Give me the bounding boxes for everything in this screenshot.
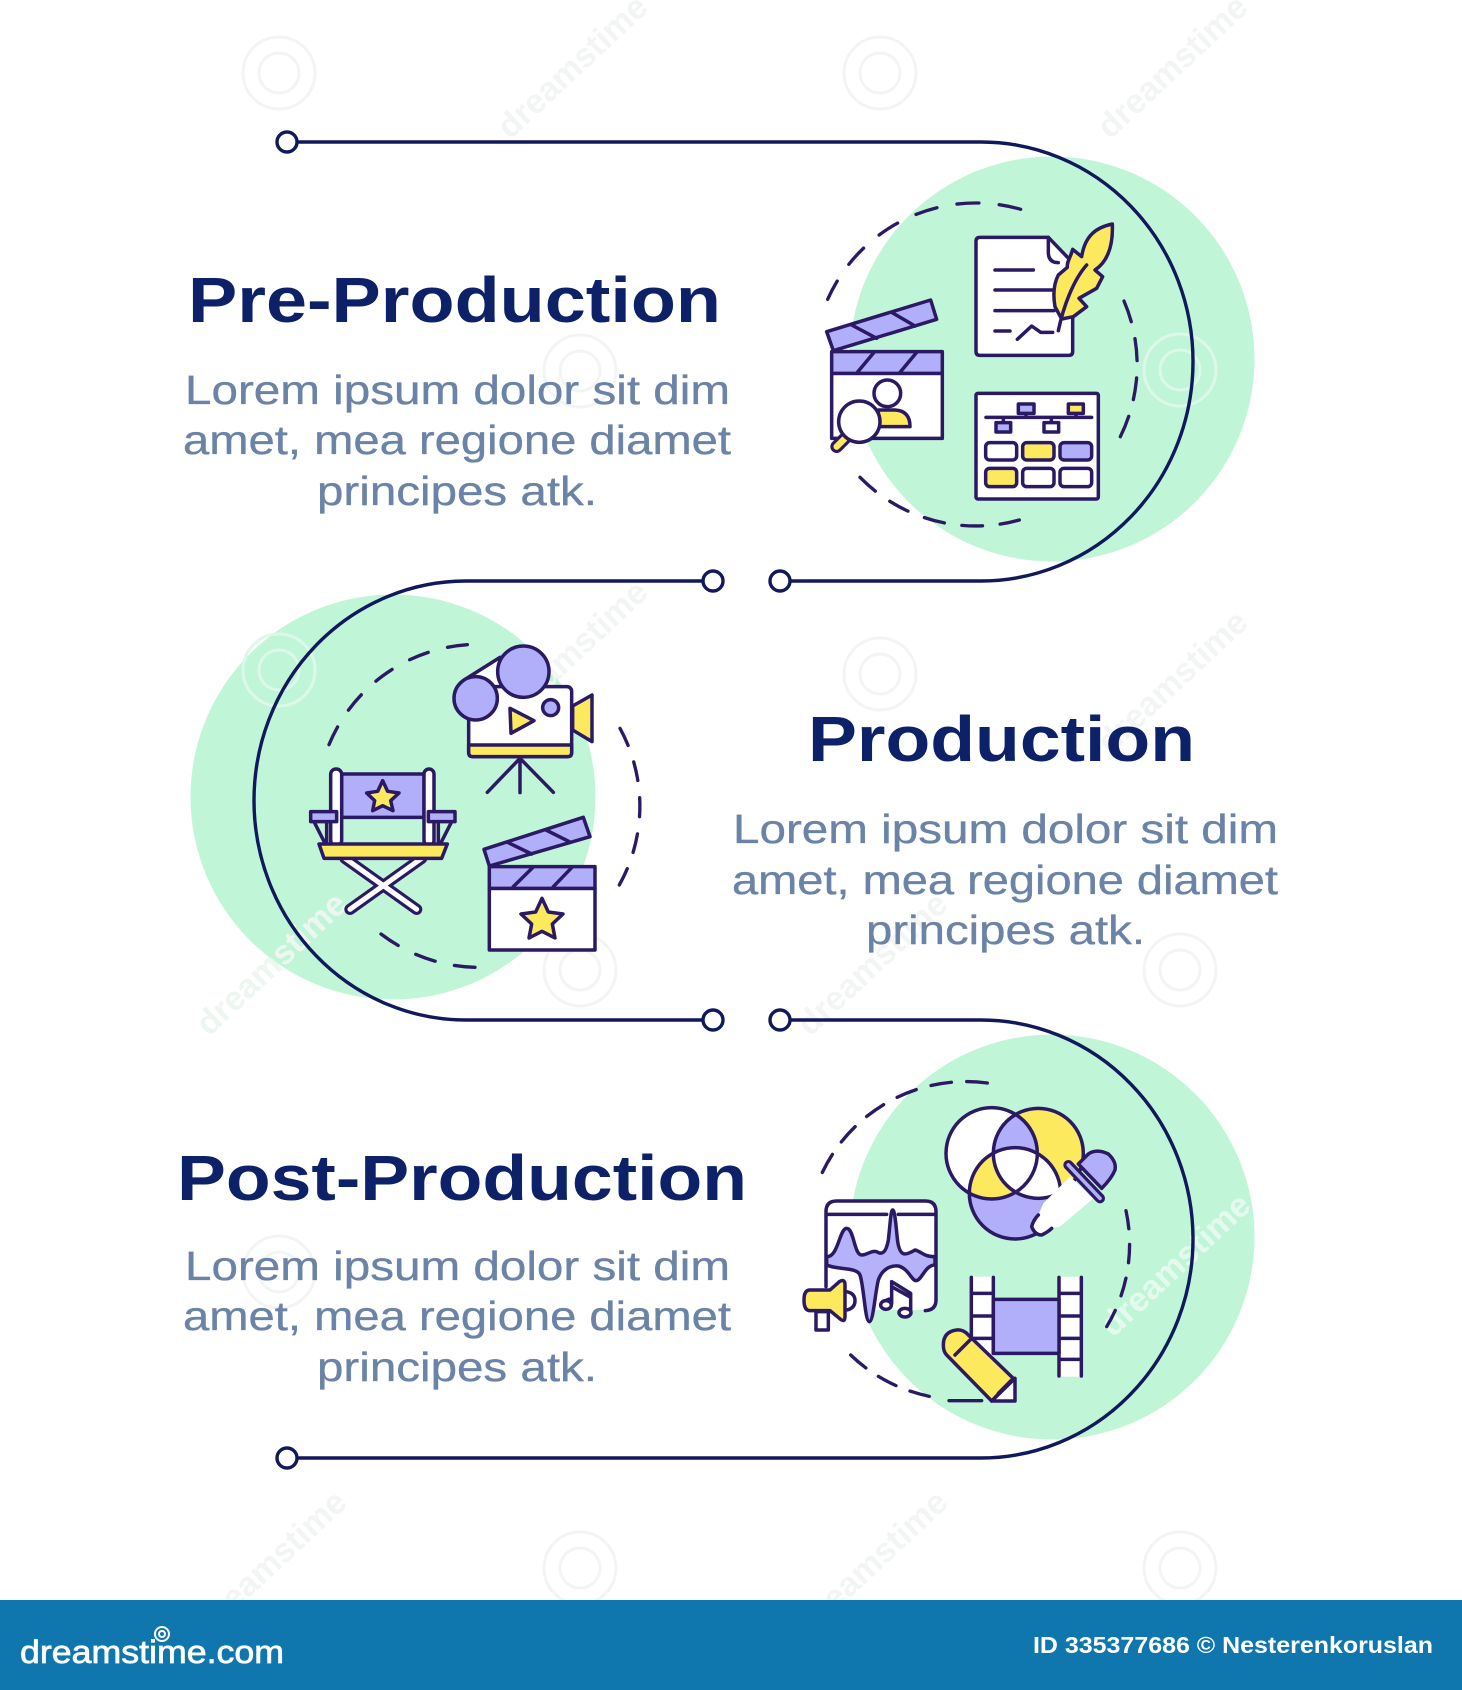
footer credit: ID 335377686 © Nesterenkoruslan (1033, 1632, 1433, 1658)
text block: production (732, 703, 1279, 953)
connector line: bottom right loop (277, 1010, 1193, 1468)
text: dreamstime (490, 573, 655, 731)
connector line: middle left loop (254, 571, 723, 1030)
text: dreamstime (790, 1483, 955, 1641)
text block: production: principes atk. (866, 907, 1145, 953)
text: dreamstime (1090, 603, 1255, 761)
icon: movie camera (454, 646, 592, 793)
text: dreamstime (189, 885, 354, 1043)
text block: production: amet, mea regione diamet (732, 857, 1279, 903)
icon: schedule board (976, 393, 1098, 499)
heading: Production: Production (808, 703, 1195, 775)
icon cluster: post-production (804, 1082, 1130, 1401)
heading: Post-Production: Post-Production (177, 1142, 747, 1214)
heading: Pre-Production: Pre-Production (188, 264, 721, 336)
text block: pre-production: Lorem ipsum dolor sit dim (185, 367, 730, 413)
icon: casting clapperboard (827, 300, 942, 447)
text block: production: Lorem ipsum dolor sit dim (733, 806, 1278, 852)
footer logo: dreamstime.com (20, 1634, 284, 1670)
icon: sound waveform, megaphone and notes (804, 1201, 936, 1330)
text block: pre-production: principes atk. (317, 468, 597, 514)
icon: film strip and pencil (943, 1277, 1082, 1401)
text block: post-production (177, 1142, 747, 1390)
text: dreamstime (1093, 1186, 1258, 1344)
footer bar (0, 1600, 1462, 1690)
text: dreamstime (189, 1483, 354, 1641)
icon: star clapperboard (484, 817, 595, 950)
icon cluster: pre-production (827, 203, 1137, 526)
green circle: production (190, 594, 596, 1000)
connector line: top to middle right (277, 132, 1193, 591)
green circle: pre-production (850, 156, 1254, 562)
green circle: post-production (850, 1034, 1254, 1440)
text: dreamstime (790, 885, 955, 1043)
text block: pre-production: amet, mea regione diamet (183, 417, 732, 463)
text block: post-production: principes atk. (317, 1344, 597, 1390)
icon cluster: production (311, 645, 640, 967)
icon: colour wheel venn and dropper (946, 1108, 1115, 1239)
icon: director chair (311, 769, 455, 909)
text block: post-production: Lorem ipsum dolor sit dim (185, 1243, 730, 1289)
text block: pre-production (183, 264, 732, 514)
icon: script and feather (976, 224, 1112, 355)
text block: post-production: amet, mea regione diamet (183, 1293, 732, 1339)
logo spiral (155, 1627, 169, 1641)
